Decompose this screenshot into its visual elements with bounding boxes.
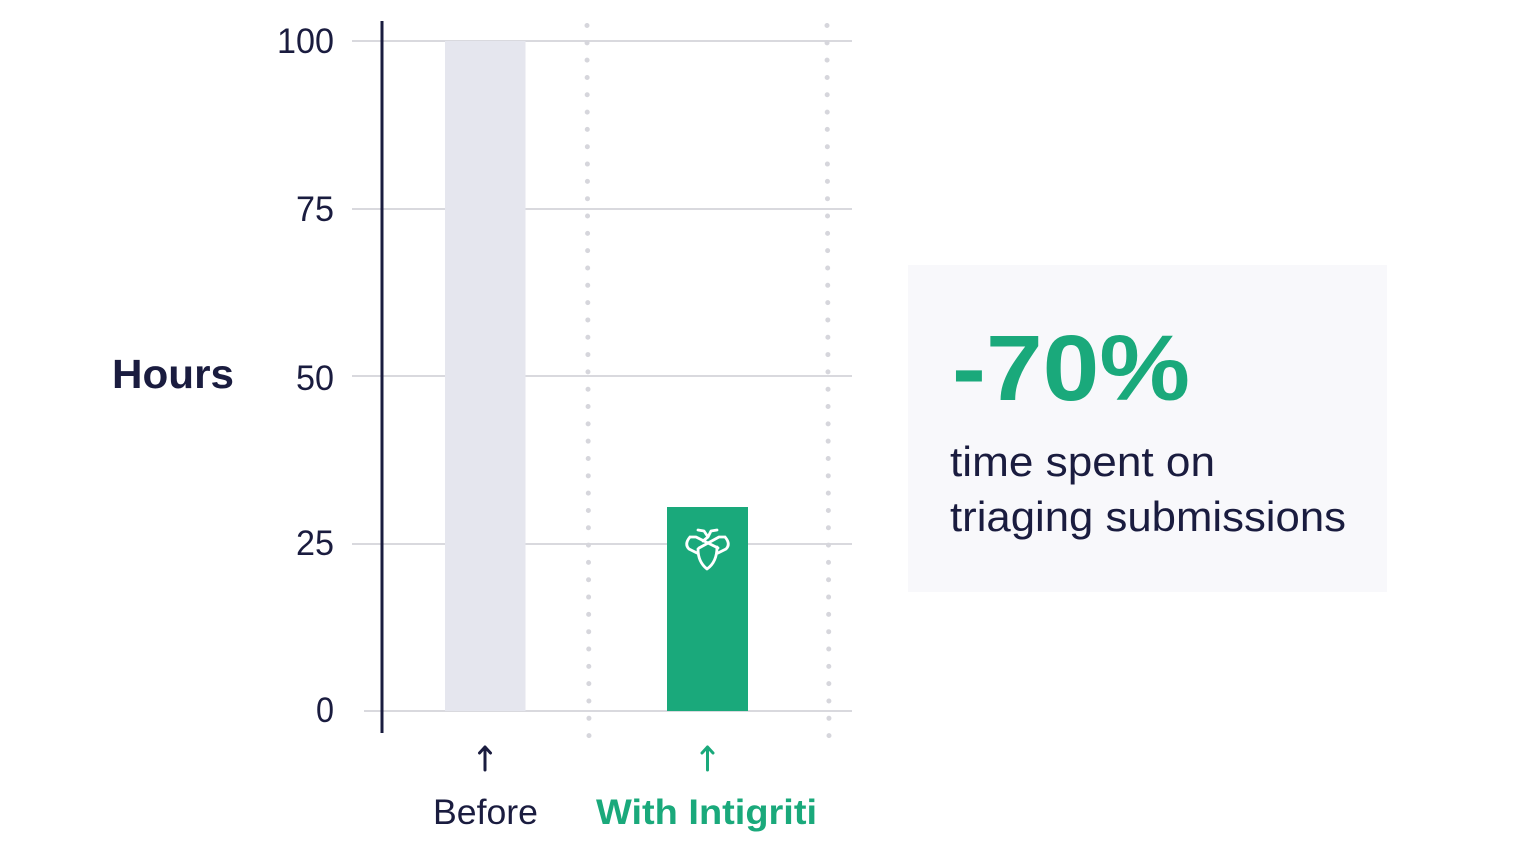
y axis labels: 75	[296, 190, 334, 229]
callout number: -70%	[952, 316, 1190, 420]
y axis labels	[277, 22, 334, 730]
label: before: Before	[433, 793, 538, 832]
arrow: with Intigriti	[702, 747, 713, 770]
panel: callout	[908, 265, 1387, 592]
callout description	[950, 438, 1346, 540]
callout description: time spent on	[950, 438, 1215, 485]
y axis labels: 100	[277, 22, 334, 61]
dotted column separators	[587, 26, 829, 738]
callout description: triaging submissions	[950, 493, 1346, 540]
y axis labels: 25	[296, 524, 334, 563]
icon: Intigriti bug logo	[687, 530, 728, 569]
y axis title: Hours	[112, 351, 234, 397]
grid lines	[352, 41, 852, 711]
bar: before	[445, 41, 526, 711]
y axis line	[380, 21, 384, 733]
y axis labels: 50	[296, 359, 334, 398]
label: with Intigriti: With Intigriti	[596, 793, 817, 832]
arrow: before	[480, 747, 490, 770]
bar: with Intigriti	[667, 507, 748, 711]
y axis labels: 0	[316, 691, 334, 730]
